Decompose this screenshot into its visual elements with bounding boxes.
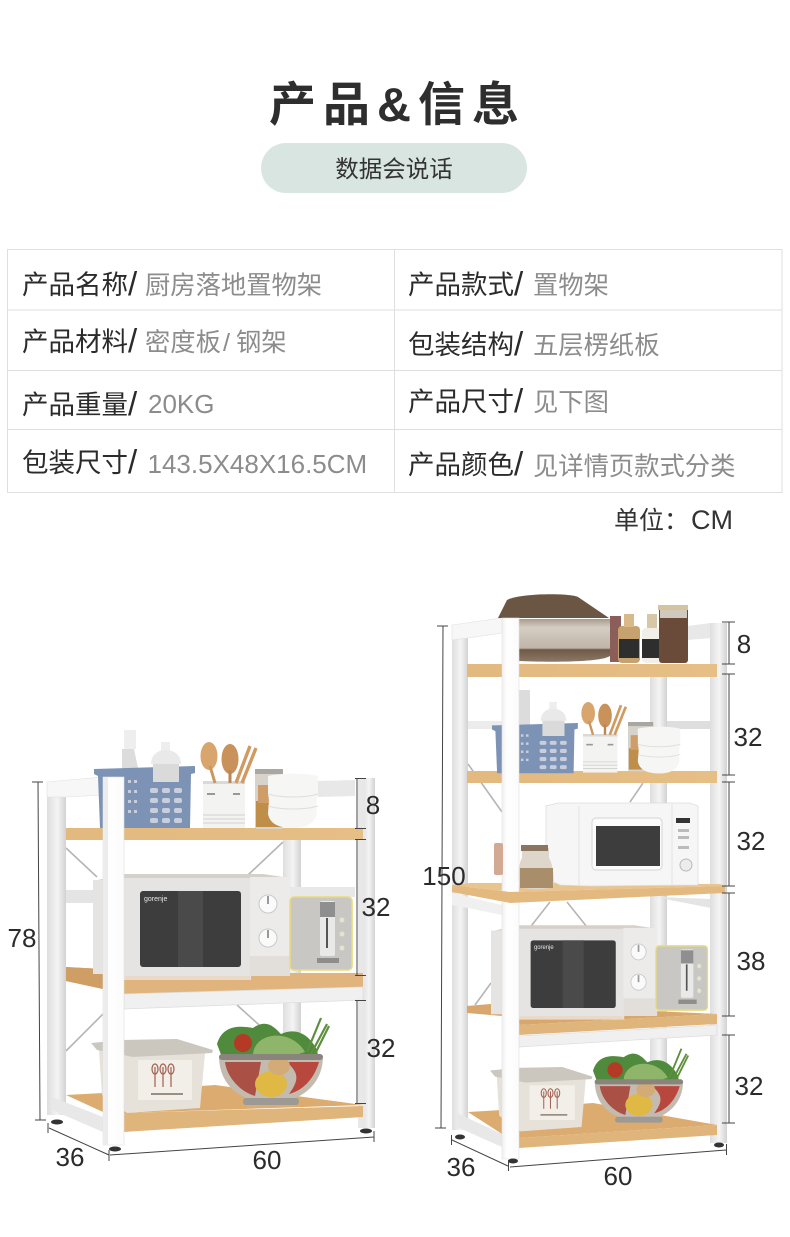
- row 4 right: [408, 445, 735, 482]
- row 2 left: /: [128, 322, 138, 359]
- dimensions: right rack: 32: [737, 826, 765, 856]
- row 3 left: [22, 385, 214, 422]
- row 3 right: [408, 382, 609, 419]
- row 3 left: 20KG: [148, 389, 214, 419]
- row 3 left: 产品重量: [22, 390, 128, 420]
- rack: five-tier (right): [452, 594, 727, 1164]
- shelf: middle: [66, 967, 363, 994]
- shelf 3 top surface: [452, 883, 725, 892]
- items: white microwave: [546, 803, 698, 886]
- items: bottles and jar: [610, 605, 688, 663]
- row 2 left: 产品材料: [22, 327, 128, 357]
- dimensions: left rack: 60: [253, 1145, 281, 1175]
- front post: [103, 777, 124, 1145]
- subtitle pill: 数据会说话: [335, 156, 453, 182]
- row 4 right: /: [514, 445, 524, 482]
- dimensions: right rack: 32: [735, 1071, 763, 1101]
- items: storage bin: [91, 1039, 213, 1113]
- dimensions: right rack: 60: [604, 1161, 632, 1191]
- row 3 left: /: [128, 385, 138, 422]
- shelf 4: [467, 1003, 717, 1035]
- row 1 right: 置物架: [533, 272, 609, 300]
- items: spice jars: [494, 843, 554, 889]
- row 1 right: /: [514, 265, 524, 302]
- items: vegetable basket: [217, 1018, 329, 1105]
- back frame: [47, 777, 375, 1132]
- row 3 right: /: [514, 382, 524, 419]
- dimensions: right rack: [422, 622, 765, 1191]
- row 1 left: 产品名称: [22, 270, 128, 300]
- row 4 left: /: [128, 443, 138, 480]
- dimensions: right rack: 8: [737, 629, 751, 659]
- items: second shelf: [492, 690, 680, 773]
- dimensions: left rack: 32: [367, 1033, 395, 1063]
- feet: [51, 1120, 372, 1152]
- row 2 right: 包装结构: [408, 330, 514, 360]
- items: vegetable basket: [593, 1049, 688, 1123]
- dimensions: left rack: [8, 778, 395, 1175]
- row 3 right: 见下图: [533, 389, 609, 417]
- shelf: bottom: [66, 1085, 363, 1132]
- shelf 1: [467, 664, 717, 677]
- row 2 left: 钢架: [236, 329, 287, 357]
- items: toaster: [290, 897, 352, 970]
- dimensions: right rack: 36: [447, 1152, 475, 1182]
- row 4 left: 143.5X48X16.5CM: [148, 449, 367, 479]
- unit note: CM: [691, 505, 733, 535]
- shelf 5: [468, 1103, 717, 1148]
- dimensions: right rack: 38: [737, 946, 765, 976]
- dimensions: left rack: 36: [56, 1142, 84, 1172]
- title: 产品&信息: [269, 78, 526, 131]
- items: microwave: [93, 874, 290, 980]
- shelf 3 front edge: [452, 885, 725, 903]
- back frame: [452, 618, 727, 1147]
- row 1 right: 产品款式: [408, 270, 514, 300]
- dimensions: right rack: 150: [422, 861, 466, 891]
- unit note: [614, 505, 733, 535]
- feet: [455, 1134, 724, 1164]
- row 1 left: 厨房落地置物架: [145, 272, 322, 300]
- items: storage bin: [490, 1067, 592, 1131]
- row 2 right: 五层楞纸板: [533, 332, 660, 360]
- row 1 left: [22, 265, 322, 302]
- items: top shelf: [94, 730, 318, 829]
- row 1 right: [408, 265, 609, 302]
- row 4 left: [22, 443, 367, 480]
- spec table: [8, 250, 782, 492]
- under-shelf beam: [124, 987, 363, 1009]
- row 2 left: /: [223, 329, 231, 357]
- row 4 right: 见详情页款式分类: [533, 453, 735, 481]
- dimensions: left rack: 8: [366, 790, 380, 820]
- row 4 left: 包装尺寸: [22, 448, 128, 478]
- subtitle pill: [261, 143, 527, 193]
- row 2 right: [408, 325, 660, 362]
- dimensions: right rack: 32: [734, 722, 762, 752]
- shelf: top: [66, 828, 363, 840]
- row 2 left: [22, 322, 287, 359]
- row 3 right: 产品尺寸: [408, 387, 514, 417]
- items: rice cooker: [498, 594, 610, 662]
- row 1 left: /: [128, 265, 138, 302]
- row 2 left: 密度板: [145, 329, 221, 357]
- shelf 2: [467, 771, 717, 783]
- front post: [502, 618, 519, 1159]
- items: gray microwave: [491, 925, 657, 1020]
- rack: three-tier (left): [47, 730, 375, 1152]
- dimensions: left rack: 78: [8, 923, 36, 953]
- unit note: 单位：: [614, 507, 689, 535]
- dimensions: left rack: 32: [362, 892, 390, 922]
- row 2 right: /: [514, 325, 524, 362]
- items: toaster: [656, 946, 707, 1010]
- row 4 right: 产品颜色: [408, 450, 514, 480]
- beam under shelf 4: [519, 1025, 717, 1047]
